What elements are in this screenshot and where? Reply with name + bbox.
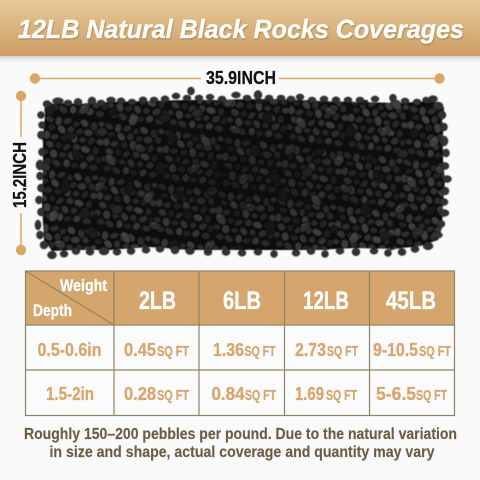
- height dimension: 15.2 inch: [10, 91, 30, 255]
- footnote: [24, 426, 457, 461]
- row: 0.5-0.6in: 0.45: [124, 339, 156, 360]
- header labels: Weight: [60, 277, 107, 295]
- table header background: [26, 271, 454, 325]
- row: 1.5-2in: 1.5-2in: [46, 383, 94, 404]
- title: 12LB Natural Black Rocks Coverages: [18, 14, 464, 44]
- width dimension: 35.9 inch: 35.9INCH: [206, 68, 276, 88]
- table values: [38, 339, 451, 404]
- header labels: 12LB: [303, 287, 349, 315]
- row: 1.5-2in: [46, 383, 447, 404]
- row: 1.5-2in: SQ FT: [157, 388, 189, 404]
- footnote: in size and shape, actual coverage and quantity may vary: [50, 444, 435, 461]
- row: 0.5-0.6in: SQ FT: [419, 344, 451, 360]
- row: 0.5-0.6in: 1.36: [213, 339, 244, 360]
- header banner: [0, 0, 480, 63]
- row: 1.5-2in: SQ FT: [416, 388, 447, 404]
- row: 0.5-0.6in: SQ FT: [244, 344, 276, 360]
- row: 1.5-2in: 1.69: [295, 383, 324, 404]
- table body background: [26, 325, 454, 416]
- row: 0.5-0.6in: 0.5-0.6in: [38, 339, 102, 360]
- width dimension: 35.9 inch: [30, 68, 445, 88]
- header labels: 45LB: [386, 287, 436, 315]
- photo: black pebbles: [35, 87, 452, 259]
- row: 0.5-0.6in: 2.73: [295, 339, 326, 360]
- header labels: Depth: [33, 302, 72, 320]
- row: 1.5-2in: 0.84: [212, 383, 245, 404]
- header labels: [33, 277, 436, 320]
- height dimension: 15.2 inch: 15.2INCH: [10, 142, 30, 208]
- coverage table: [26, 271, 454, 416]
- row: 1.5-2in: SQ FT: [245, 388, 276, 404]
- row: 1.5-2in: 0.28: [124, 383, 156, 404]
- row: 0.5-0.6in: 9-10.5: [373, 339, 418, 360]
- header labels: 6LB: [223, 287, 261, 315]
- pebbles along the edge: [35, 87, 452, 259]
- row: 1.5-2in: 5-6.5: [376, 383, 416, 404]
- row: 0.5-0.6in: SQ FT: [157, 344, 189, 360]
- header labels: 2LB: [139, 287, 176, 315]
- row: 0.5-0.6in: SQ FT: [327, 344, 358, 360]
- row: 1.5-2in: SQ FT: [326, 388, 357, 404]
- row: 0.5-0.6in: [38, 339, 451, 360]
